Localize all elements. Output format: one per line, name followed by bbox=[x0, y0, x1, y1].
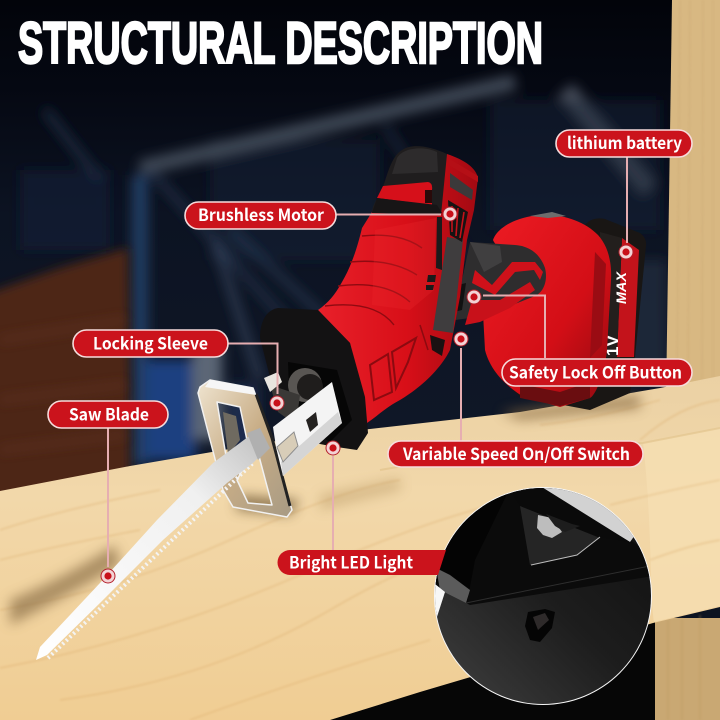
label: Bright LED Light: Bright LED Light bbox=[289, 550, 413, 574]
saw: rubber boot bbox=[260, 308, 368, 450]
label: Variable Speed On/Off Switch: Variable Speed On/Off Switch bbox=[402, 441, 630, 465]
label: Variable Speed On/Off Switch bbox=[388, 332, 643, 467]
label: Locking Sleeve bbox=[73, 330, 284, 410]
saw blade bbox=[36, 428, 270, 660]
label: lithium battery: lithium battery bbox=[567, 130, 682, 154]
saw: clamp plate bbox=[273, 382, 342, 476]
label: Bright LED Light bbox=[278, 441, 446, 575]
brick wall bbox=[0, 248, 130, 510]
black rubber cap bbox=[372, 146, 447, 215]
wooden post at right bbox=[330, 0, 720, 720]
saw: handle bbox=[454, 242, 546, 325]
battery brand marks: 1V bbox=[603, 335, 622, 356]
label: lithium battery bbox=[556, 130, 692, 259]
battery brand marks bbox=[603, 270, 629, 356]
wooden plank bbox=[0, 376, 720, 720]
LED lens dot bbox=[525, 609, 555, 642]
saw: silver shoe bbox=[198, 380, 292, 517]
inset circle: LED light close-up bbox=[434, 487, 652, 705]
battery brand marks: MAX bbox=[613, 270, 629, 304]
label: Safety Lock Off Button: Safety Lock Off Button bbox=[509, 360, 682, 384]
saw: red motor body bbox=[318, 146, 478, 423]
saw: battery pack bbox=[493, 218, 646, 410]
label: Brushless Motor: Brushless Motor bbox=[198, 202, 325, 226]
label: Saw Blade bbox=[48, 401, 168, 583]
saw: red battery mount bbox=[483, 212, 611, 407]
grey side panels bbox=[433, 237, 463, 333]
label: Brushless Motor bbox=[185, 202, 457, 229]
label: Saw Blade: Saw Blade bbox=[69, 402, 149, 426]
grooves bbox=[325, 235, 422, 325]
label: Locking Sleeve: Locking Sleeve bbox=[93, 330, 208, 354]
shadows on wood bbox=[10, 395, 640, 625]
label: Safety Lock Off Button bbox=[467, 290, 692, 386]
